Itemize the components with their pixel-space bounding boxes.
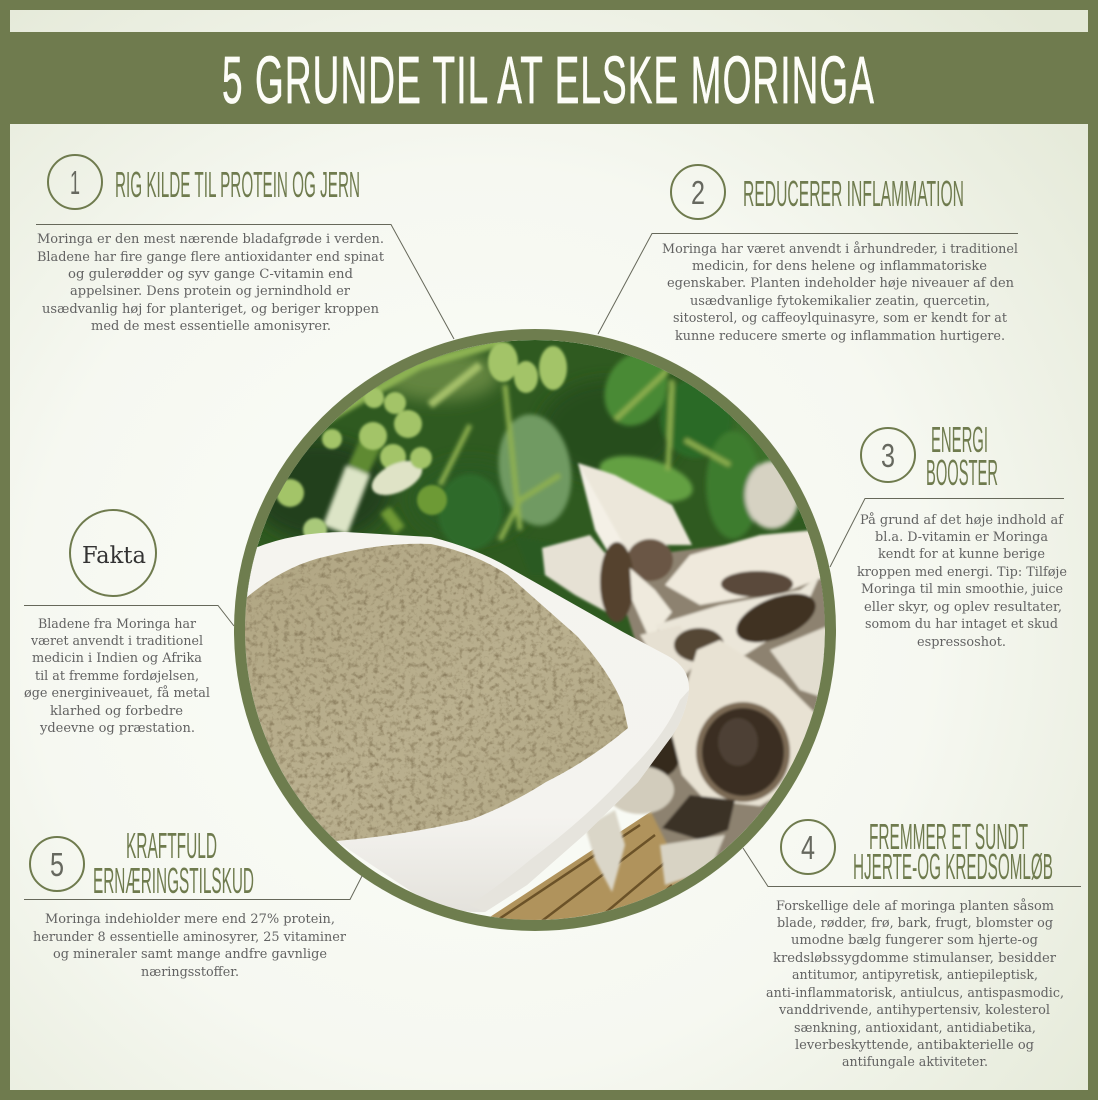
number badge 3 <box>861 428 915 482</box>
body text 1: og gulerødder og syv gange C-vitamin end <box>68 266 353 281</box>
body text 4: vanddrivende, antihypertensiv, kolesterol <box>778 1002 1050 1017</box>
connector 4 <box>743 848 1081 886</box>
heading 4 <box>853 816 1053 887</box>
fakta text: ydeevne og præstation. <box>39 720 195 735</box>
body text 1: med de mest essentielle amonisyrer. <box>91 318 331 333</box>
body text 1: Moringa er den mest nærende bladafgrøde i verden. <box>37 231 384 246</box>
body text 2: sitosterol, og caffeoylquinasyre, som er kendt for at <box>673 310 1007 325</box>
upper seed pieces <box>665 530 830 605</box>
body text 1: Bladene har fire gange flere antioxidanter end spinat <box>37 249 384 264</box>
reason 1: RIG KILDE TIL PROTEIN OG JERN <box>115 164 360 205</box>
number badge 2: 2 <box>691 174 705 211</box>
body text 5 <box>33 911 347 979</box>
fakta connector <box>24 606 234 626</box>
body text 3: På grund af det høje indhold af <box>860 512 1064 527</box>
body text 3: espressoshot. <box>917 634 1006 649</box>
body text 4: kredsløbssygdomme stimulanser, besidder <box>773 950 1057 965</box>
number badge 1: 1 <box>70 164 80 201</box>
body text 2: kunne reducere smerte og inflammation hurtigere. <box>675 328 1005 343</box>
fakta text <box>24 616 210 735</box>
number badge 4: 4 <box>801 829 815 866</box>
body text 3: Moringa til min smoothie, juice <box>861 581 1063 596</box>
body text 4: anti-inflammatorisk, antiulcus, antispasmodic, <box>766 985 1064 1000</box>
reason 1 <box>36 155 454 339</box>
body text 4: Forskellige dele af moringa planten såsom <box>776 898 1054 913</box>
body text 4: antifungale aktiviteter. <box>842 1054 988 1069</box>
number badge 3: 3 <box>881 437 895 474</box>
central photo: moringa powder, leaves and seeds <box>230 334 840 930</box>
body text 3: kroppen med energi. Tip: Tilføje <box>857 564 1067 579</box>
connector 2 <box>598 234 1018 334</box>
reason 3: BOOSTER <box>926 452 998 493</box>
number badge 5: 5 <box>50 846 64 883</box>
body text 5: og mineraler samt mange andfre gavnlige <box>53 946 327 961</box>
fakta badge <box>70 510 156 596</box>
body text 5: næringsstoffer. <box>141 964 239 979</box>
body text 1: appelsiner. Dens protein og jernindhold er <box>70 283 351 298</box>
circular ring <box>240 334 830 926</box>
bamboo mat <box>490 812 690 920</box>
heading 5 <box>93 825 254 901</box>
white bowl <box>230 532 689 912</box>
number badge 2 <box>671 165 725 219</box>
big seed wing <box>672 640 818 806</box>
reason 4 <box>743 816 1081 1069</box>
number badge 1 <box>48 155 102 209</box>
fakta text: øge energiniveauet, få metal <box>24 685 210 700</box>
body text 2: medicin, for dens helene og inflammatoriske <box>692 258 987 273</box>
body text 5: Moringa indehiolder mere end 27% protein, <box>45 911 335 926</box>
body text 3: somom du har intaget et skud <box>865 616 1058 631</box>
fakta text: klarhed og forbedre <box>50 703 183 718</box>
body text 3: eller skyr, og oplev resultater, <box>864 599 1062 614</box>
powder <box>230 544 628 841</box>
body text 4: leverbeskyttende, antibakterielle og <box>795 1037 1034 1052</box>
body text 4: blade, rødder, frø, bark, frugt, blomster og <box>777 915 1053 930</box>
reason 5 <box>24 825 362 979</box>
fakta text: medicin i Indien og Afrika <box>32 650 202 665</box>
reason 3: ENERGI <box>931 419 988 460</box>
body text 2: Moringa har været anvendt i århundreder, i traditionel <box>662 241 1018 256</box>
reason 2 <box>598 165 1018 343</box>
title banner <box>0 32 1098 124</box>
reason 5: ERNÆRINGSTILSKUD <box>93 860 254 901</box>
connector 5 <box>24 876 362 900</box>
fakta text: været anvendt i traditionel <box>30 633 203 648</box>
body text 2: usædvanlige fytokemikalier zeatin, quercetin, <box>690 293 990 308</box>
fakta badge: Fakta <box>82 543 146 569</box>
body text 4: antitumor, antipyretisk, antiepileptisk, <box>792 967 1038 982</box>
connector 3 <box>830 498 1064 567</box>
fakta text: Bladene fra Moringa har <box>38 616 197 631</box>
upper flaps <box>578 463 692 560</box>
body text 3: bl.a. D-vitamin er Moringa <box>875 529 1049 544</box>
body text 3: kendt for at kunne berige <box>878 546 1045 561</box>
dark gaps behind seeds <box>626 544 825 878</box>
connector 1 <box>36 224 454 339</box>
body text 4: umodne bælg fungerer som hjerte-og <box>791 932 1038 947</box>
seeds <box>542 463 840 892</box>
body text 2: egenskaber. Planten indeholder høje niveauer af den <box>667 275 1014 290</box>
heading 3 <box>926 419 998 493</box>
body text 1 <box>37 231 384 333</box>
under pieces <box>648 736 680 776</box>
number badge 4 <box>781 820 835 874</box>
body text 4: sænkning, antioxidant, antidiabetika, <box>794 1020 1036 1035</box>
heading 5: KRAFTFULD <box>126 825 217 866</box>
bottom pieces <box>662 795 735 840</box>
fakta section <box>24 510 234 735</box>
number badge 5 <box>30 837 84 891</box>
body text 2 <box>662 241 1018 343</box>
body text 1: usædvanlig høj for planteriget, og beriger kroppen <box>42 301 379 316</box>
body text 4 <box>766 898 1064 1069</box>
fakta text: til at fremme fordøjelsen, <box>35 668 199 683</box>
reason 3 <box>830 419 1067 649</box>
body text 5: herunder 8 essentielle aminosyrer, 25 vitaminer <box>33 929 347 944</box>
foliage background <box>240 335 840 655</box>
body text 3 <box>857 512 1067 649</box>
